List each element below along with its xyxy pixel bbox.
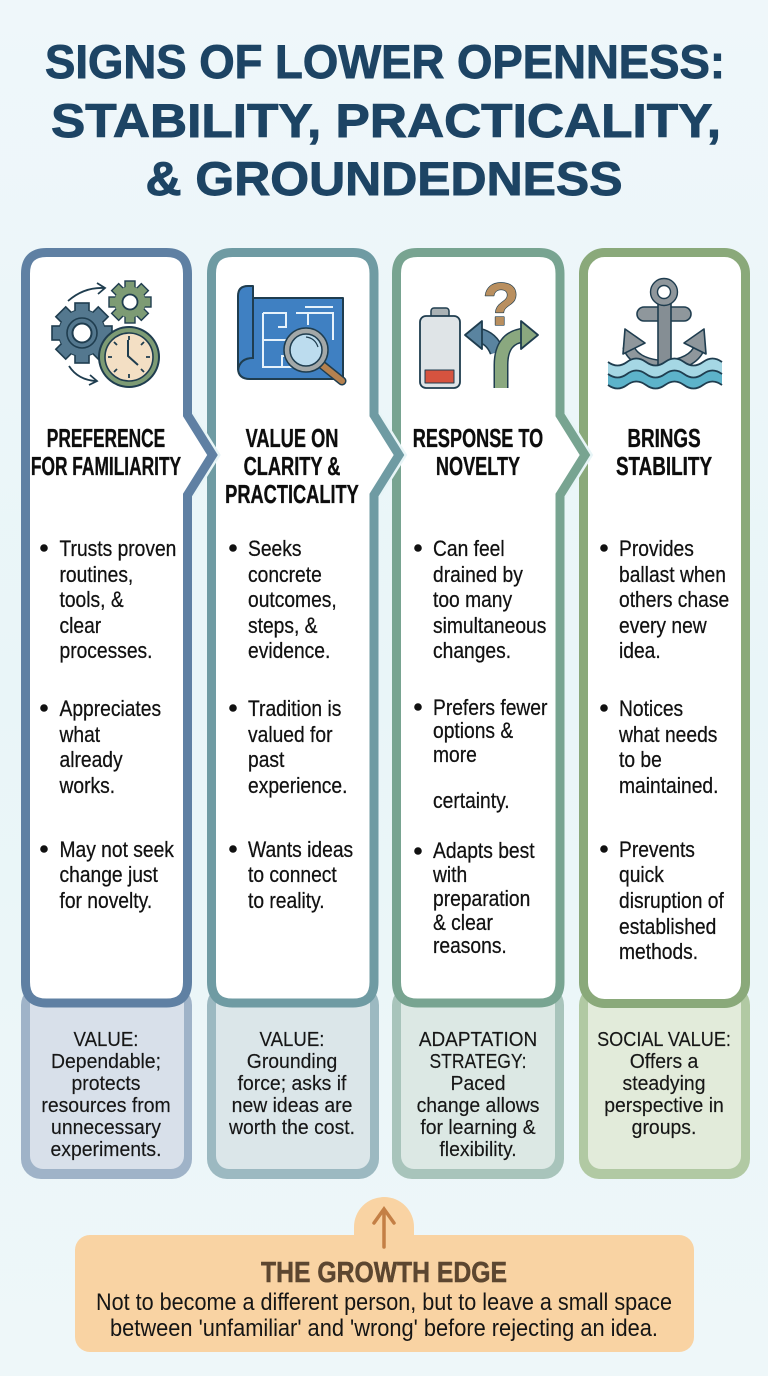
bullet list: preference for familiarity: already (60, 748, 123, 772)
bullet list: response to novelty: with (432, 863, 467, 887)
panel: value on clarity and practicality (207, 252, 399, 1179)
bullet list: response to novelty: preparation (433, 887, 530, 911)
bullet list: value on clarity: to connect (248, 863, 337, 887)
value card: dependable: experiments. (51, 1139, 161, 1161)
panel: brings stability (579, 252, 750, 1179)
bullet list: response to novelty: drained by (433, 563, 523, 587)
value card: grounding force: force; asks if (238, 1073, 347, 1095)
bullet list: preference for familiarity: tools, & (60, 588, 124, 612)
card frame with chevron (396, 252, 585, 1003)
bullet list: response to novelty: reasons. (433, 934, 507, 958)
bullet list: brings stability: Notices (619, 697, 683, 721)
bullet list: brings stability (600, 537, 729, 964)
bullet list: value on clarity: Seeks (248, 537, 301, 561)
bullet list: preference for familiarity: what (59, 723, 100, 747)
card frame with chevron (26, 252, 212, 1003)
bullet list: preference for familiarity: processes. (60, 639, 153, 663)
bullet list: value on clarity: to reality. (248, 889, 325, 913)
bullet list: brings stability: idea. (619, 639, 661, 663)
bullet list: preference for familiarity: change just (60, 863, 158, 887)
bullet list: value on clarity: past (248, 748, 285, 772)
bullet list: brings stability: established (619, 915, 716, 939)
callout: the growth edge (75, 1197, 694, 1352)
bullet list: brings stability: to be (619, 748, 662, 772)
bullet list: response to novelty: certainty. (433, 789, 510, 813)
icon: gears and clock (52, 281, 160, 388)
heading: preference for familiarity: FOR FAMILIARITY (31, 452, 181, 481)
value card: dependable: VALUE: (74, 1029, 138, 1051)
bullet list: value on clarity: outcomes, (248, 588, 337, 612)
callout text (96, 1289, 672, 1342)
title: STABILITY, PRACTICALITY, (51, 94, 721, 147)
value card: dependable: protects (72, 1073, 141, 1095)
icon: blueprint and magnifier (238, 286, 343, 381)
card frame with chevron (212, 252, 399, 1003)
bullet list: response to novelty: more (433, 743, 477, 767)
bullet list: preference for familiarity (40, 537, 176, 913)
bullet list: response to novelty: Prefers fewer (433, 696, 547, 720)
icon part: large gear (52, 303, 112, 363)
icon: up arrow (374, 1209, 394, 1247)
bullet list: response to novelty (414, 537, 547, 958)
title (45, 35, 725, 205)
value card: grounding force: worth the cost. (228, 1117, 355, 1139)
bullet list: response to novelty: simultaneous (433, 614, 546, 638)
callout text: between 'unfamiliar' and 'wrong' before rejecting an idea. (110, 1315, 658, 1342)
heading: response to novelty: NOVELTY (436, 452, 520, 481)
bullet list: preference for familiarity: clear (60, 614, 101, 638)
value card: grounding force: Grounding (247, 1051, 337, 1073)
bullet list: value on clarity (229, 537, 353, 913)
value card: social value: Offers a (630, 1051, 698, 1073)
heading: value on clarity and practicality: PRACTICALITY (225, 480, 359, 509)
panel: preference for familiarity (21, 252, 212, 1179)
bullet list: brings stability: Prevents (619, 838, 695, 862)
value card: adaptation strategy: for learning & (420, 1117, 536, 1139)
heading: value on clarity and practicality: VALUE ON (246, 424, 338, 453)
bullet list: brings stability: quick (619, 863, 665, 887)
value card: dependable (21, 985, 192, 1179)
value card: adaptation strategy: ADAPTATION (419, 1029, 537, 1051)
bullet list: response to novelty: changes. (433, 639, 511, 663)
bullet list: preference for familiarity: works. (59, 774, 115, 798)
bullet list: brings stability: maintained. (619, 774, 718, 798)
callout heading: THE GROWTH EDGE (261, 1257, 507, 1289)
value card: adaptation strategy (392, 985, 564, 1179)
bullet list: response to novelty: options & (433, 719, 513, 743)
value card: dependable: unnecessary (51, 1117, 161, 1139)
bullet list: preference for familiarity: May not seek (60, 838, 175, 862)
heading: response to novelty (413, 424, 543, 481)
bullet list: value on clarity: experience. (248, 774, 347, 798)
bullet list: value on clarity: steps, & (248, 614, 318, 638)
bullet list: brings stability: ballast when (619, 563, 726, 587)
icon part: clock (98, 326, 160, 388)
value card: grounding force (207, 985, 379, 1179)
bullet list: preference for familiarity: Trusts proven (60, 537, 176, 561)
value card: social value: SOCIAL VALUE: (597, 1029, 731, 1051)
bullet list: response to novelty: & clear (433, 911, 493, 935)
heading: value on clarity and practicality (225, 424, 359, 509)
value card: dependable: Dependable; (51, 1051, 161, 1073)
value card: adaptation strategy: flexibility. (439, 1139, 517, 1161)
heading: brings stability: BRINGS (627, 424, 701, 453)
value card: adaptation strategy: Paced (451, 1073, 505, 1095)
title: SIGNS OF LOWER OPENNESS: (45, 35, 725, 88)
bullet list: brings stability: every new (619, 614, 707, 638)
bullet list: brings stability: what needs (618, 723, 717, 747)
heading: preference for familiarity: PREFERENCE (47, 424, 165, 453)
bullet list: value on clarity: concrete (248, 563, 322, 587)
bullet list: brings stability: methods. (619, 940, 698, 964)
bullet list: preference for familiarity: Appreciates (60, 697, 161, 721)
value card: dependable: resources from (41, 1095, 171, 1117)
bullet list: preference for familiarity: routines, (60, 563, 133, 587)
bullet list: brings stability: disruption of (619, 889, 724, 913)
value card: adaptation strategy: change allows (417, 1095, 540, 1117)
icon part: circular arrows (68, 283, 105, 385)
bullet list: value on clarity: valued for (248, 723, 333, 747)
bullet list: value on clarity: Tradition is (248, 697, 341, 721)
value card: grounding force: VALUE: (260, 1029, 324, 1051)
bullet list: value on clarity: Wants ideas (248, 838, 353, 862)
value card: grounding force: new ideas are (232, 1095, 352, 1117)
callout text: Not to become a different person, but to leave a small space (96, 1289, 672, 1316)
bullet list: response to novelty: Can feel (433, 537, 505, 561)
card frame (584, 252, 746, 1004)
title: & GROUNDEDNESS (146, 152, 622, 205)
value card: social value (579, 985, 750, 1179)
heading: brings stability (616, 424, 712, 481)
bullet list: preference for familiarity: for novelty. (60, 889, 152, 913)
bullet list: brings stability: Provides (619, 537, 694, 561)
icon: anchor in waves (608, 278, 722, 388)
panel: response to novelty (392, 252, 585, 1179)
heading: preference for familiarity (31, 424, 181, 481)
bullet list: response to novelty: too many (433, 588, 513, 612)
icon: low battery and fork (420, 271, 538, 388)
heading: response to novelty: RESPONSE TO (413, 424, 543, 453)
icon part: small gear (109, 281, 151, 323)
icon: low battery and fork: ? (483, 271, 519, 338)
value card: social value: steadying (623, 1073, 705, 1095)
heading: brings stability: STABILITY (616, 452, 712, 481)
bullet list: response to novelty: Adapts best (433, 839, 535, 863)
heading: value on clarity and practicality: CLARITY & (244, 452, 340, 481)
bullet list: value on clarity: evidence. (248, 639, 330, 663)
bullet list: brings stability: others chase (619, 588, 729, 612)
value card: social value: perspective in (604, 1095, 724, 1117)
value card: social value: groups. (632, 1117, 696, 1139)
value card: adaptation strategy: STRATEGY: (429, 1051, 527, 1073)
